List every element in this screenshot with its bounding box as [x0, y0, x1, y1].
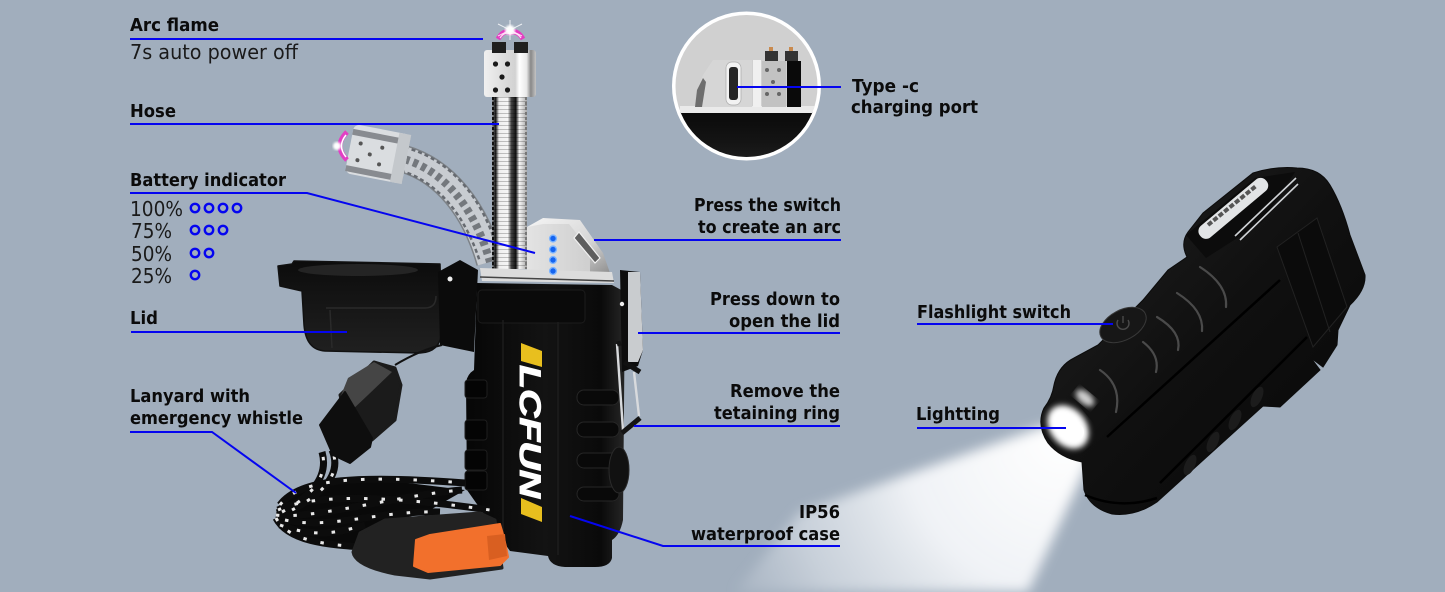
label: hose: Hose — [130, 101, 176, 122]
product: bent hose with arc head — [333, 124, 499, 262]
label: type-c port: Type -c — [852, 76, 919, 97]
label: press the switch: Press the switch — [694, 195, 841, 216]
product: lanyard rope — [276, 450, 490, 548]
label: arc flame: Arc flame — [130, 15, 219, 36]
side grips left — [465, 380, 487, 490]
battery levels legend: 25% — [131, 264, 172, 288]
product: orange whistle — [353, 513, 508, 578]
battery levels legend: 50% — [131, 242, 172, 266]
label: battery indicator: Battery indicator — [130, 170, 286, 191]
label: lanyard: emergency whistle — [130, 408, 303, 429]
flashlight lens glow — [1039, 397, 1097, 457]
label: waterproof case — [570, 502, 840, 546]
label: retaining ring: tetaining ring — [714, 403, 840, 424]
flashlight power switch — [1094, 300, 1152, 350]
product: retaining ring and clip — [617, 270, 643, 433]
label: type-c port — [737, 76, 978, 118]
product: flashlight body — [1039, 168, 1365, 515]
product: lighter case — [465, 283, 629, 567]
label: waterproof case: IP56 — [799, 502, 840, 523]
label: press the switch: to create an arc — [698, 217, 841, 238]
flashlight side panel — [1277, 218, 1347, 347]
label: press down — [638, 289, 840, 333]
label: arc flame — [130, 15, 483, 64]
logo bars — [521, 343, 542, 367]
flashlight lower grips — [1181, 385, 1266, 477]
flashlight ridges — [1100, 267, 1226, 412]
label: battery indicator — [130, 170, 535, 288]
product: lighter head — [480, 218, 614, 283]
label: lighting: Lightting — [916, 404, 1000, 425]
logo text: LCFUN — [513, 365, 546, 500]
battery LEDs — [550, 235, 556, 274]
flashlight chrome clip — [1186, 172, 1295, 258]
label: type-c port: charging port — [851, 97, 978, 118]
side grips right — [577, 390, 619, 501]
label: lid: Lid — [130, 308, 158, 329]
label: retaining ring — [634, 381, 840, 426]
label: arc flame: 7s auto power off — [130, 40, 299, 64]
product: lighter lid — [278, 260, 478, 353]
label: press the switch — [594, 195, 841, 240]
label: retaining ring: Remove the — [730, 381, 840, 402]
label: waterproof case: waterproof case — [691, 524, 840, 545]
battery levels legend — [130, 197, 241, 288]
label: press down: Press down to — [710, 289, 840, 310]
product: straight hose with arc head — [484, 20, 536, 269]
battery levels legend: 75% — [131, 219, 172, 243]
flashlight beam — [735, 425, 1092, 592]
battery levels legend: 100% — [130, 197, 183, 221]
label: lanyard: Lanyard with — [130, 386, 250, 407]
label: flashlight switch: Flashlight switch — [917, 302, 1071, 323]
product: small whistle buckle — [320, 345, 442, 463]
label: lanyard — [130, 386, 303, 493]
label: press down: open the lid — [729, 311, 840, 332]
inset: type-c port detail — [670, 10, 830, 162]
